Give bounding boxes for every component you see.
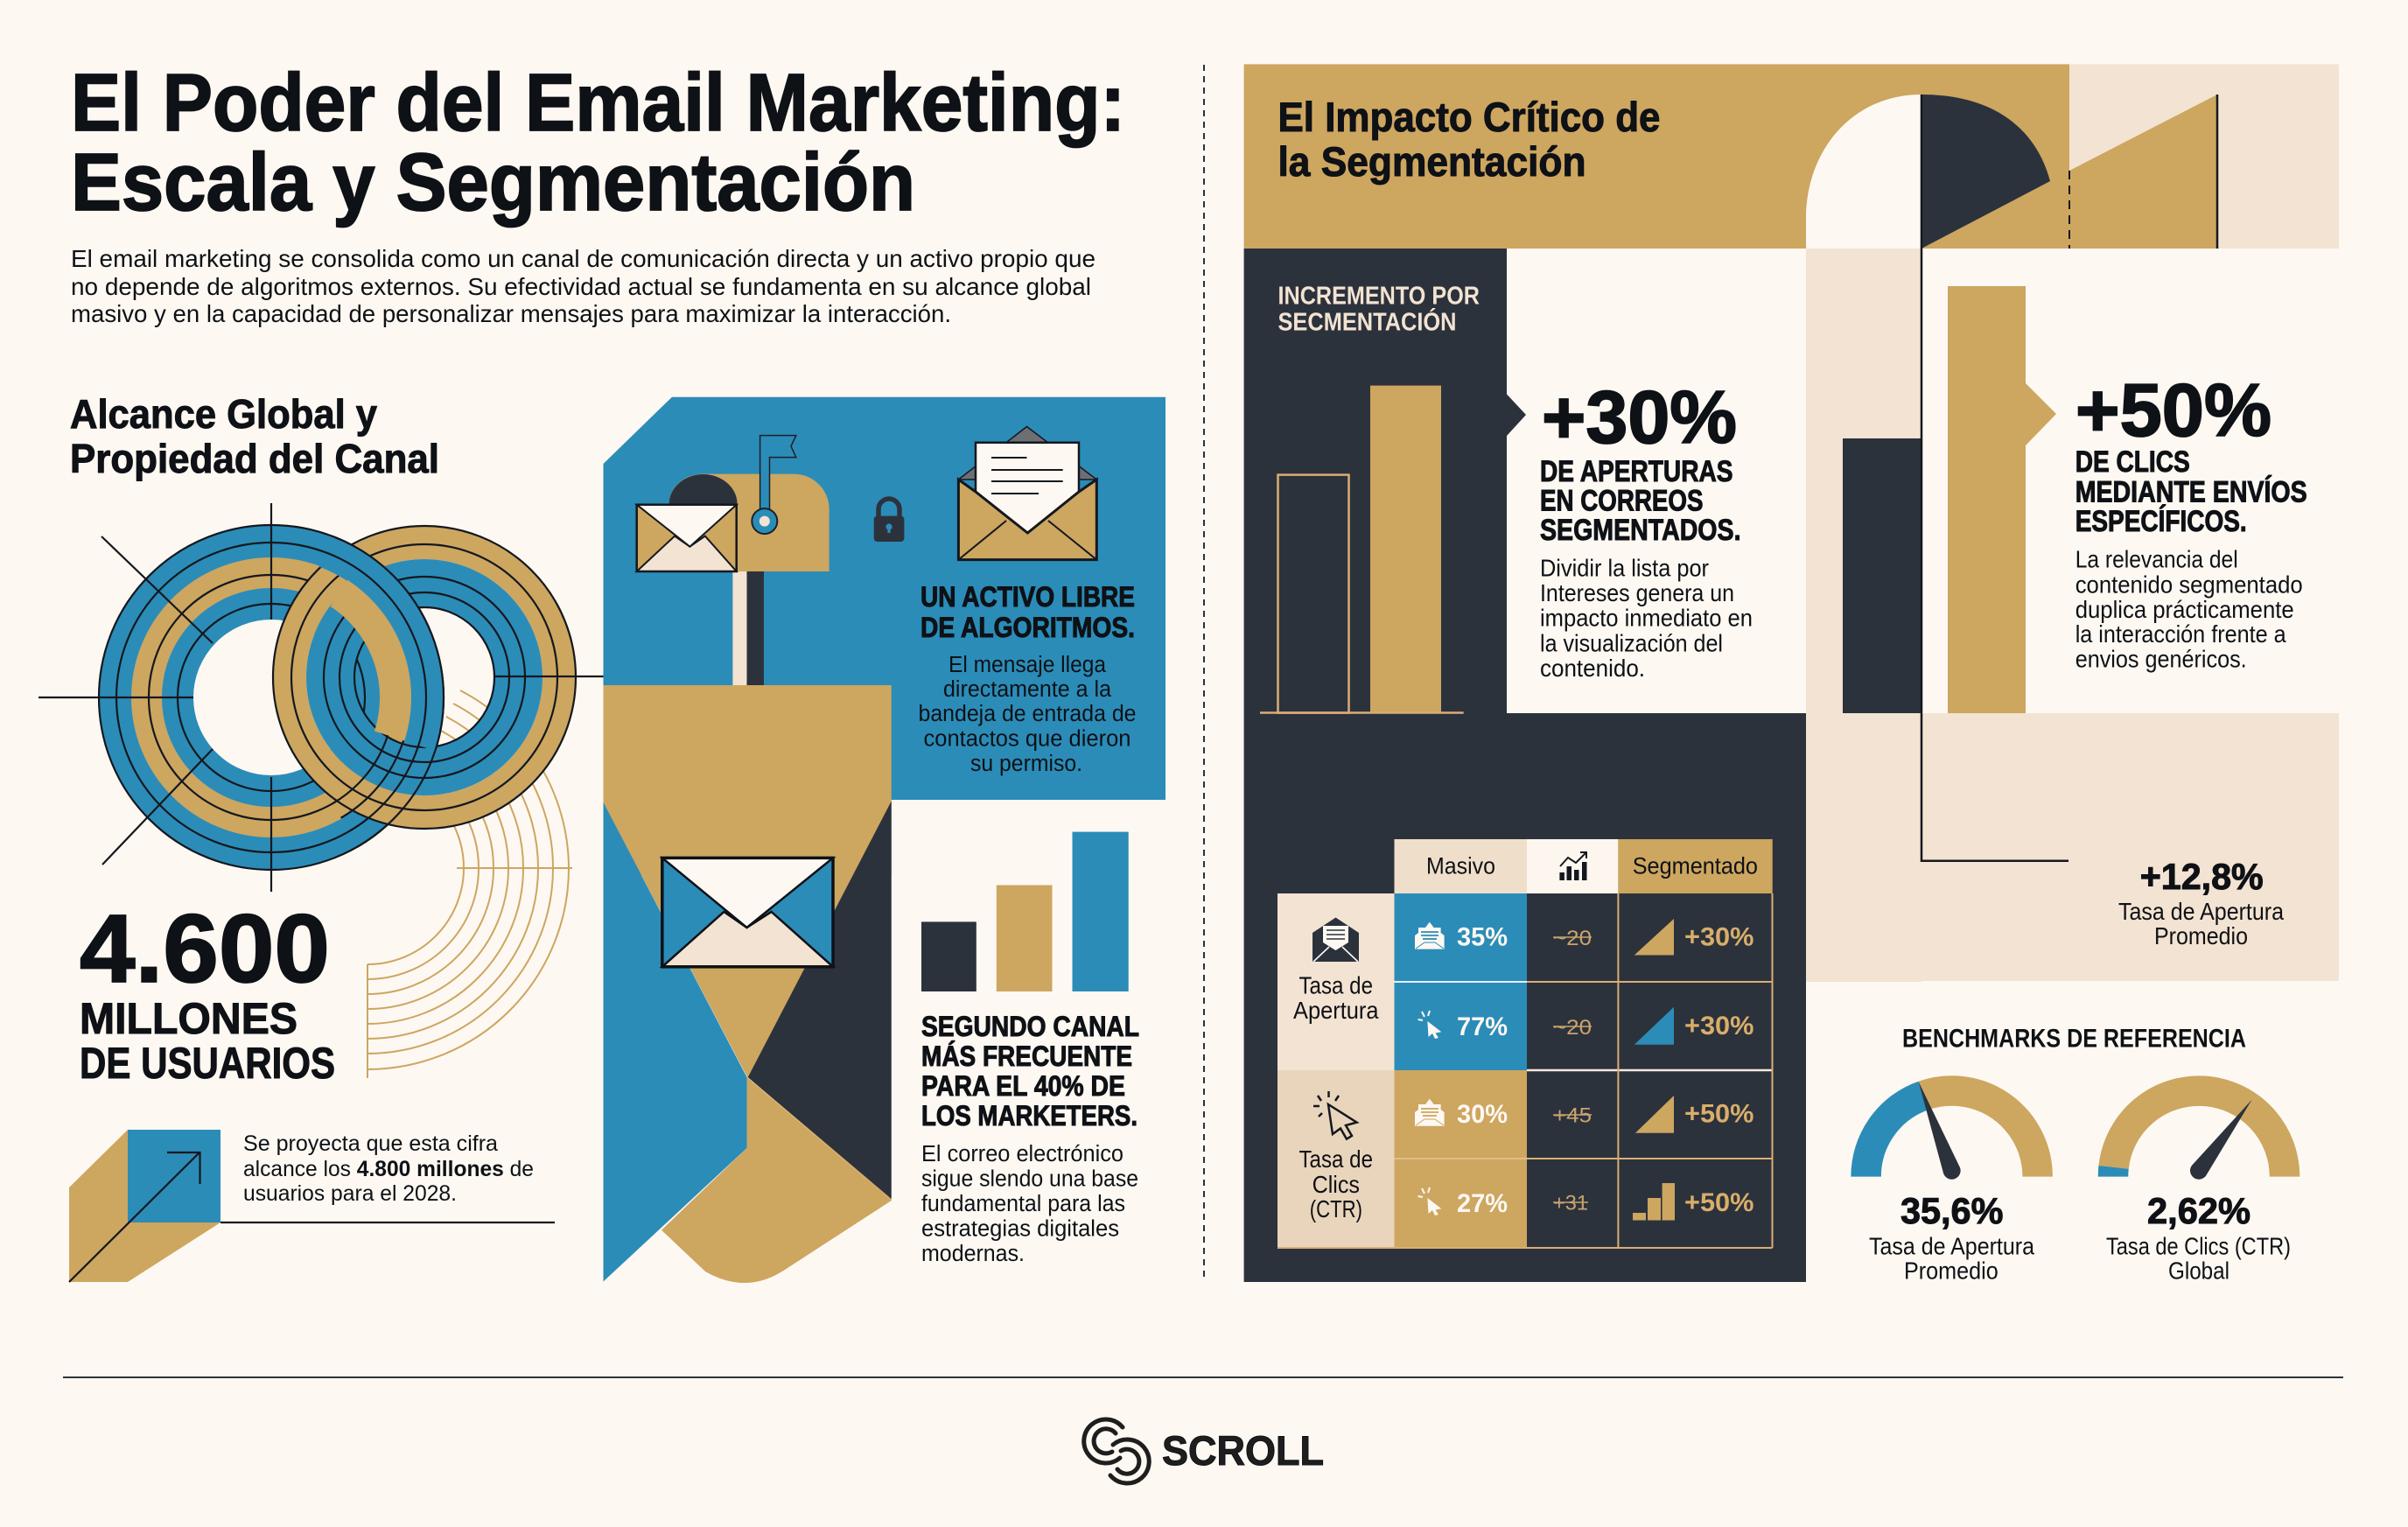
icon: growth arrow block	[69, 1130, 555, 1282]
struck-through middle values: ~20	[1553, 1016, 1592, 1040]
shape: arch and dark quarter circle	[1806, 95, 2050, 249]
stat: +30% aperturas: +30%	[1542, 376, 1737, 459]
text: segundo canal: El correo electrónico	[921, 1142, 1124, 1166]
gauge: tasa de apertura: Tasa de Apertura	[1869, 1232, 2035, 1260]
main title	[71, 57, 1125, 228]
stat: +50% clics: envios genéricos.	[2076, 646, 2247, 672]
projection text: alcance los 4.800 millones de	[243, 1157, 534, 1181]
text: activo libre de algoritmos: UN ACTIVO LIBRE	[920, 581, 1135, 613]
footer logo: scroll: SCROLL	[1162, 1427, 1324, 1474]
main title: Escala y Segmentación	[71, 137, 915, 228]
intro paragraph: masivo y en la capacidad de personalizar mensajes para maximizar la interacción.	[71, 300, 951, 327]
comparison table	[1278, 839, 1773, 1248]
icon: white cursor 2	[1418, 1187, 1441, 1215]
icon: white cursor	[1418, 1011, 1441, 1039]
gauge: tasa de apertura: Promedio	[1904, 1257, 1998, 1285]
text: activo libre de algoritmos: El mensaje llega	[948, 653, 1107, 677]
table header	[1395, 839, 1773, 893]
icon: open envelope with letter	[958, 427, 1096, 560]
ring: blue	[38, 503, 444, 892]
panel: right header band	[1244, 64, 2339, 249]
projection text	[243, 1131, 534, 1206]
stat: +12,8%: +12,8%	[2140, 856, 2264, 897]
stat: +50% clics: +50%	[2076, 369, 2272, 452]
panel: dark panel	[1244, 249, 1806, 1282]
segmentado cells: +30%	[1684, 922, 1754, 952]
intro paragraph: El email marketing se consolida como un canal de comunicación directa y un activo propio que	[71, 245, 1096, 272]
icon: large envelope	[662, 858, 833, 967]
shape: dark block	[1843, 438, 1922, 713]
table row group: tasa de apertura: Apertura	[1293, 997, 1379, 1024]
bar: gold column with chevron	[1948, 286, 2056, 713]
masivo cells: 30%	[1457, 1100, 1508, 1129]
heading: impacto critico: la Segmentación	[1278, 138, 1586, 185]
text: segundo canal: modernas.	[921, 1242, 1025, 1266]
label: incremento por segmentacion	[1278, 282, 1480, 336]
icon: chart arrow	[1559, 852, 1587, 880]
interlocking rings chart	[38, 503, 606, 892]
ring: gold	[273, 526, 606, 829]
stat: +30% aperturas: EN CORREOS	[1540, 485, 1703, 518]
segmentado cells: +30%	[1684, 1012, 1754, 1040]
footer logo: scroll	[1084, 1419, 1324, 1483]
text: segundo canal: fundamental para las	[921, 1192, 1125, 1216]
icon: mailbox	[637, 436, 830, 685]
table grid lines	[1278, 893, 1773, 1248]
icon: white envelope	[1415, 922, 1445, 949]
icon: envelope dark	[1312, 917, 1359, 962]
stat: +12,8%: Tasa de Apertura	[2118, 898, 2285, 925]
segmentado cells: +50%	[1684, 1188, 1754, 1217]
text: segundo canal: PARA EL 40% DE	[921, 1070, 1125, 1102]
text: segundo canal: LOS MARKETERS.	[921, 1100, 1138, 1131]
text: activo libre de algoritmos	[919, 581, 1136, 776]
stat: +50% clics: MEDIANTE ENVÍOS	[2076, 476, 2307, 509]
table row group: tasa de apertura	[1278, 893, 1395, 1070]
stat: +50% clics: DE CLICS	[2076, 445, 2190, 479]
masivo cells: 27%	[1457, 1189, 1508, 1218]
panel: geometric envelope composition	[604, 685, 892, 1283]
heading: impacto critico	[1278, 94, 1661, 185]
gauge: tasa de clics: Global	[2168, 1257, 2230, 1285]
stat: +50% clics: la interacción frente a	[2076, 620, 2286, 648]
stat: +30% aperturas: SEGMENTADOS.	[1540, 514, 1741, 547]
stat: +50% clics: contenido segmentado	[2076, 571, 2303, 599]
heading: impacto critico: El Impacto Crítico de	[1278, 94, 1661, 140]
big stat: 4.600 millones: 4.600	[80, 895, 330, 1003]
table row group: tasa de clics: Tasa de	[1298, 1145, 1373, 1173]
icon: small envelope	[637, 505, 737, 571]
text: segundo canal: MÁS FRECUENTE	[921, 1040, 1132, 1072]
gauge: tasa de clics	[2106, 1091, 2291, 1285]
stat: +30% aperturas: impacto inmediato en	[1540, 605, 1753, 632]
label: incremento por segmentacion: SECMENTACIÓN	[1278, 306, 1456, 336]
stat: +30% aperturas: Intereses genera un	[1540, 579, 1734, 606]
big stat: 4.600 millones: DE USUARIOS	[80, 1039, 335, 1088]
vertical dashed divider	[1203, 65, 1205, 1282]
bar chart: segmentation increase	[1260, 386, 1464, 713]
stat: +50% clics	[2076, 369, 2307, 672]
heading: benchmarks: BENCHMARKS DE REFERENCIA	[1902, 1024, 2246, 1054]
stat: +30% aperturas: Dividir la lista por	[1540, 555, 1709, 581]
stat: +12,8%: Promedio	[2154, 922, 2248, 949]
panel: blue algorithm panel	[604, 397, 1166, 875]
masivo cells: 35%	[1457, 922, 1508, 952]
struck-through middle values: +45	[1553, 1104, 1592, 1127]
bar chart: three rising bars	[921, 832, 1129, 991]
panel: cream column and strip	[1806, 249, 2339, 982]
text: activo libre de algoritmos: directamente a la	[943, 677, 1112, 702]
text: segundo canal: sigue slendo una base	[921, 1167, 1138, 1192]
thin concentric gold arcs	[368, 690, 572, 1078]
struck-through middle values	[1553, 927, 1592, 1215]
big stat: 4.600 millones: MILLONES	[80, 994, 298, 1043]
heading: alcance global: Propiedad del Canal	[70, 436, 439, 481]
text: activo libre de algoritmos: contactos que dieron	[924, 727, 1130, 752]
struck-through middle values: +31	[1553, 1192, 1588, 1215]
gauge: tasa de apertura	[1866, 1082, 2038, 1285]
panel: light background for stats	[1507, 249, 2339, 713]
table row group: tasa de clics: Clics	[1312, 1171, 1360, 1198]
heading: alcance global: Alcance Global y	[70, 391, 377, 437]
intro paragraph	[71, 245, 1096, 327]
segmentado cells	[1633, 919, 1754, 1220]
axis line	[1922, 95, 2068, 861]
table row group: tasa de clics: (CTR)	[1310, 1195, 1362, 1222]
text: segundo canal	[921, 1011, 1139, 1266]
stat: +50% clics: ESPECÍFICOS.	[2076, 505, 2247, 538]
text: segundo canal: SEGUNDO CANAL	[921, 1011, 1139, 1042]
table header: Masivo	[1426, 852, 1495, 879]
stat: +30% aperturas: DE APERTURAS	[1540, 455, 1732, 488]
text: segundo canal: estrategias digitales	[921, 1216, 1119, 1241]
intro paragraph: no depende de algoritmos externos. Su efectividad actual se fundamenta en su alcance global	[71, 273, 1091, 300]
table row group: tasa de clics	[1278, 1070, 1395, 1248]
stat: +30% aperturas: contenido.	[1540, 655, 1645, 682]
stat: +50% clics: duplica prácticamente	[2076, 596, 2294, 623]
gauge: tasa de clics: Tasa de Clics (CTR)	[2106, 1232, 2291, 1260]
label: incremento por segmentacion: INCREMENTO POR	[1278, 282, 1480, 310]
stat: +30% aperturas	[1540, 376, 1753, 682]
gauge: tasa de clics: 2,62%	[2147, 1190, 2250, 1231]
icon: cursor dark	[1313, 1091, 1357, 1139]
text: activo libre de algoritmos: DE ALGORITMOS.	[920, 612, 1135, 643]
icon: mailbox flag	[752, 436, 796, 534]
heading: alcance global	[70, 391, 439, 481]
gauge: tasa de apertura: 35,6%	[1900, 1190, 2003, 1231]
masivo cells: 77%	[1457, 1012, 1508, 1041]
table row group: tasa de apertura: Tasa de	[1298, 972, 1373, 999]
icon: padlock	[874, 499, 904, 542]
table header: Segmentado	[1633, 852, 1758, 879]
projection text: Se proyecta que esta cifra	[243, 1131, 498, 1156]
footer rule	[63, 1376, 2343, 1378]
stat: +50% clics: La relevancia del	[2076, 546, 2238, 572]
main title: El Poder del Email Marketing:	[71, 57, 1125, 148]
stat: +12,8%	[2118, 856, 2285, 949]
icon: logo mark	[1084, 1419, 1149, 1483]
masivo cells	[1395, 893, 1527, 1248]
text: activo libre de algoritmos: su permiso.	[970, 752, 1082, 776]
projection text: usuarios para el 2028.	[243, 1181, 457, 1206]
text: activo libre de algoritmos: bandeja de entrada de	[919, 702, 1136, 726]
struck-through middle values: ~20	[1553, 927, 1592, 950]
big stat: 4.600 millones	[80, 895, 335, 1088]
icon: white envelope 2	[1415, 1099, 1445, 1126]
segmentado cells: +50%	[1684, 1099, 1754, 1129]
stat: +30% aperturas: la visualización del	[1540, 630, 1723, 656]
